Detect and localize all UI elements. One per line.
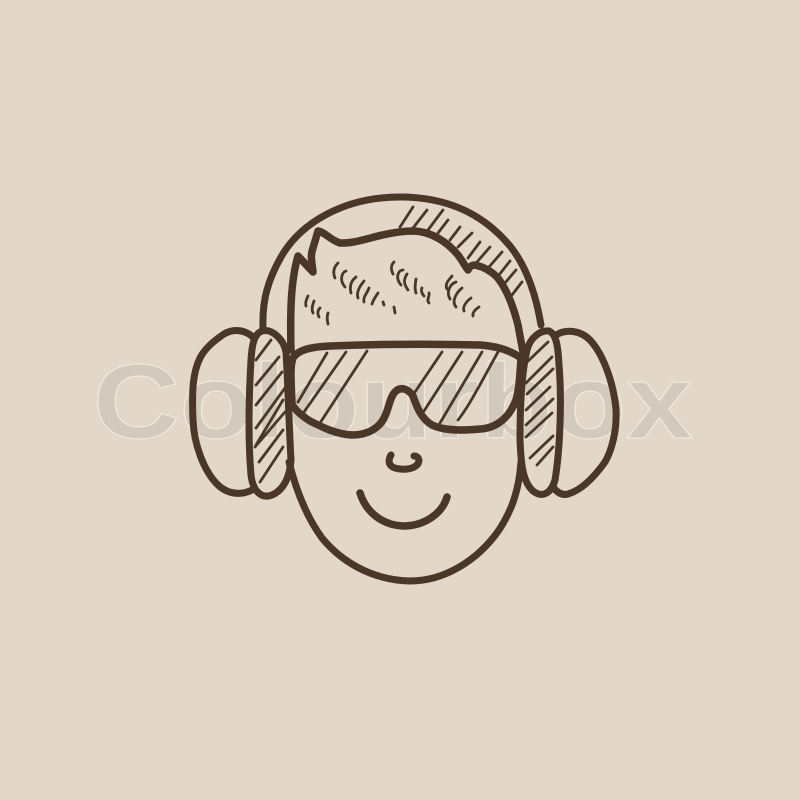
hair: [291, 231, 523, 352]
top band hatching: [400, 207, 522, 295]
smile: [360, 493, 447, 526]
nose: [389, 455, 419, 469]
hair strokes: [306, 262, 479, 324]
left pad hatching: [255, 340, 285, 482]
sunglasses: [291, 344, 521, 435]
left outer ear cup: [193, 331, 254, 493]
lens hatching: [298, 351, 498, 423]
right outer ear cup: [553, 331, 616, 494]
left ear pad: [249, 331, 291, 496]
right ear pad: [520, 331, 560, 494]
headband: [263, 197, 541, 328]
icon: line drawing: [193, 197, 616, 581]
right pad hatching: [526, 342, 553, 465]
watermark text: Colourbox: [93, 343, 693, 461]
hatching: [255, 207, 553, 482]
face outline: [289, 462, 521, 581]
